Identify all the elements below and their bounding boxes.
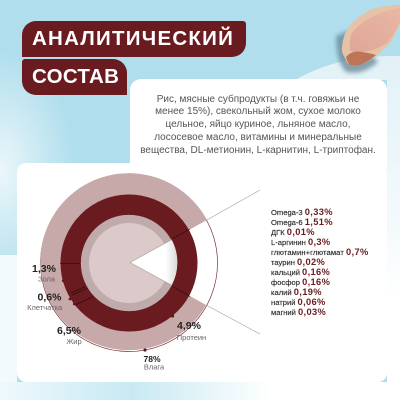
heading: line 2: СОСТАВ	[32, 65, 119, 88]
label: moisture: Влага	[144, 362, 165, 372]
heading: line 2	[22, 59, 127, 95]
text: ingredients	[140, 94, 376, 156]
heading: line 1: АНАЛИТИЧЕСКИЙ	[32, 27, 234, 50]
marker dots	[62, 279, 174, 352]
label: ash: 1,3%	[32, 263, 57, 275]
dark ring	[60, 205, 190, 321]
list: nutrients: Omega-6 1,51%	[271, 217, 333, 227]
list: nutrients: Omega-3 0,33%	[271, 207, 333, 217]
list: nutrients: кальций 0,16%	[271, 267, 330, 277]
list: nutrients: глютамин+глютамат 0,7%	[271, 247, 369, 257]
list: nutrients: фосфор 0,16%	[271, 277, 330, 287]
text: ingredients: цельное, яйцо куриное, льняное масло,	[166, 119, 350, 130]
outer ring	[40, 173, 218, 352]
list: nutrients	[270, 207, 369, 317]
label: fat: Жир	[66, 337, 82, 346]
list: nutrients: магний 0,03%	[271, 307, 326, 317]
label: moisture	[143, 354, 165, 372]
text: ingredients: лососевое масло, витамины и минеральные	[154, 132, 362, 143]
label: fat	[57, 325, 82, 346]
label: protein: Протеин	[177, 333, 206, 342]
label: fat: 6,5%	[57, 325, 82, 337]
list: nutrients: натрий 0,06%	[271, 297, 326, 307]
wedge guide lines	[130, 190, 260, 334]
text: ingredients: вещества, DL-метионин, L-карнитин, L-триптофан.	[140, 145, 376, 156]
list: nutrients: таурин 0,02%	[271, 257, 325, 267]
list: nutrients: калий 0,19%	[271, 287, 322, 297]
label: ash: Зола	[38, 275, 56, 284]
heading: line 1	[22, 21, 246, 57]
panel: composition text	[130, 79, 387, 169]
list: nutrients: ДГК 0,01%	[271, 227, 315, 237]
panel: chart card	[17, 163, 387, 382]
label: fiber	[27, 292, 63, 312]
inner disc	[81, 215, 177, 311]
icon: meat slice	[334, 4, 400, 76]
label: fiber: 0,6%	[38, 292, 62, 304]
label: protein	[177, 320, 206, 342]
label: ash	[32, 263, 57, 284]
text: ingredients: Рис, мясные субпродукты (в т.ч. говяжьи не	[157, 94, 359, 104]
text: ingredients: менее 15%), свекольный жом, сухое молоко	[155, 106, 361, 117]
label: protein: 4,9%	[177, 320, 202, 332]
label: fiber: Клетчатка	[27, 303, 63, 312]
list: nutrients: L-аргинин 0,3%	[271, 237, 331, 247]
label: moisture: 78%	[143, 354, 161, 364]
